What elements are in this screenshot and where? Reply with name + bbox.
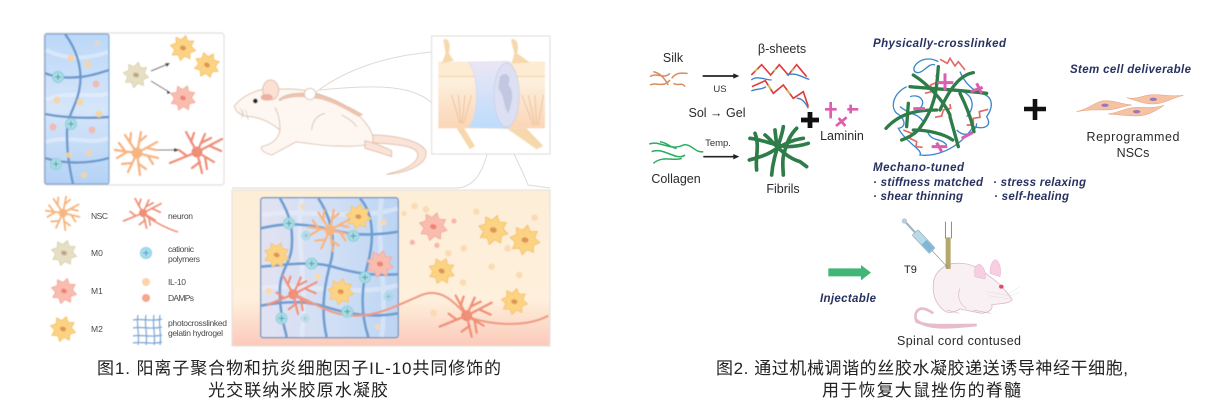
NSC to neuron differentiation xyxy=(115,132,222,175)
labels: Silk xyxy=(663,51,684,65)
heading and properties: · shear thinning xyxy=(873,191,963,203)
cells in hydrogel xyxy=(260,202,397,314)
legend labels: NSC xyxy=(91,211,108,221)
panel: physically crosslinked network xyxy=(873,38,1086,203)
legend labels: DAMPs xyxy=(168,293,194,303)
panel: silk and collagen gel formation xyxy=(649,42,864,196)
caption: figure 1: 光交联纳米胶原水凝胶 xyxy=(208,381,388,400)
legend labels: M1 xyxy=(91,286,103,296)
macrophage cells and arrows xyxy=(121,33,225,152)
icon: plus sign xyxy=(801,112,819,128)
released factors xyxy=(266,203,538,338)
panel: reprogrammed NSCs xyxy=(1070,64,1192,160)
network drawing xyxy=(886,58,991,155)
silk and collagen drawings xyxy=(649,65,858,175)
labels: Reprogrammed xyxy=(1086,130,1180,144)
caption: figure 2 xyxy=(716,359,1128,400)
panel: hydrogel release and cell polarization xyxy=(44,33,225,185)
labels: Sol → Gel xyxy=(689,106,745,120)
labels xyxy=(1070,64,1192,160)
panel: implant detail with hydrogel and cells xyxy=(232,190,550,346)
hydrogel block xyxy=(261,198,398,338)
heading and properties: Mechano-tuned xyxy=(873,162,965,174)
labels: Collagen xyxy=(651,172,701,186)
cationic polymer markers xyxy=(276,218,393,324)
labels: Fibrils xyxy=(766,182,800,196)
legend labels: neuron xyxy=(168,211,193,221)
legend labels: cationic xyxy=(168,244,195,254)
labels: Temp. xyxy=(705,138,731,149)
icon: rat with injury site xyxy=(234,80,426,174)
legend labels: polymers xyxy=(168,254,200,264)
heading and properties: · self-healing xyxy=(994,191,1069,203)
legend labels xyxy=(91,211,227,338)
labels xyxy=(820,264,1021,348)
legend xyxy=(46,197,227,345)
neuron axon across the lesion xyxy=(293,293,548,324)
labels: Injectable xyxy=(820,293,877,305)
icon: plus sign xyxy=(1024,99,1046,120)
labels xyxy=(651,42,864,196)
legend icons xyxy=(46,197,178,345)
cells outside hydrogel xyxy=(416,209,543,337)
legend labels: photocrosslinked xyxy=(168,318,227,328)
panel: spinal cord cross section with hydrogel xyxy=(432,36,550,154)
legend labels: gelatin hydrogel xyxy=(168,328,223,338)
heading and properties xyxy=(873,38,1086,203)
labels: US xyxy=(713,84,727,95)
labels: Spinal cord contused xyxy=(897,334,1021,348)
heading and properties: · stress relaxing xyxy=(993,177,1086,189)
caption: figure 2: 图2. 通过机械调谐的丝胶水凝胶递送诱导神经干细胞, xyxy=(716,359,1128,378)
labels: Stem cell deliverable xyxy=(1070,64,1192,76)
panel: injection into spinal cord contused rat xyxy=(820,216,1021,348)
fibroblast-like stem cells xyxy=(1077,95,1183,116)
heading and properties: Physically-crosslinked xyxy=(873,38,1007,50)
labels: NSCs xyxy=(1117,146,1149,160)
connector lines from rat to zoomed panels xyxy=(232,52,550,188)
caption: figure 1 xyxy=(97,359,501,400)
caption: figure 1: 图1. 阳离子聚合物和抗炎细胞因子IL-10共同修饰的 xyxy=(97,359,501,378)
labels: β-sheets xyxy=(758,42,806,56)
labels: Laminin xyxy=(820,129,864,143)
legend labels: IL-10 xyxy=(168,277,186,287)
hydrogel strip xyxy=(45,34,109,184)
heading and properties: · stiffness matched xyxy=(873,177,984,189)
legend labels: M2 xyxy=(91,324,103,334)
caption: figure 2: 用于恢复大鼠挫伤的脊髓 xyxy=(822,381,1021,400)
legend labels: M0 xyxy=(91,248,103,258)
labels: T9 xyxy=(904,264,917,276)
mouse, syringe and impactor xyxy=(828,216,1020,327)
